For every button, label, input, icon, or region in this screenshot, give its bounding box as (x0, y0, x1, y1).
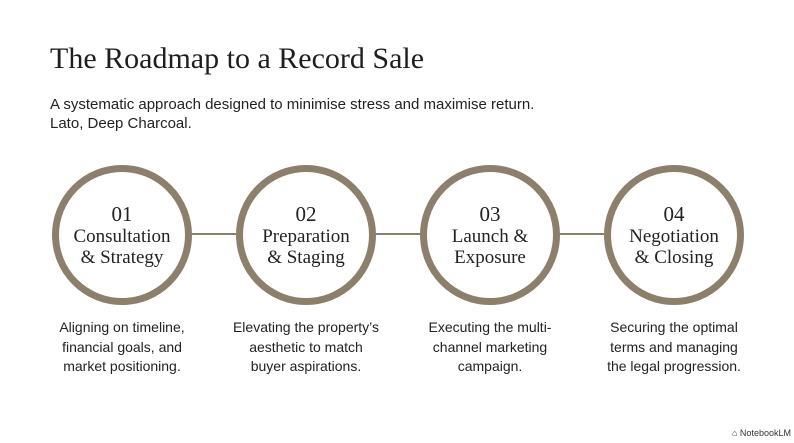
step 2 circle (236, 165, 376, 305)
subtitle: A systematic approach designed to minimise stress and maximise return. (50, 96, 534, 113)
step 2 circle: & Staging (267, 247, 345, 268)
connector line 2-3 (374, 233, 424, 235)
step 4 description: terms and managing (610, 338, 738, 354)
step 2 description (233, 319, 379, 374)
step 1 circle: 01 (112, 202, 132, 226)
step 4 circle: 04 (664, 202, 684, 226)
step 4 circle: & Closing (635, 247, 713, 268)
step 4 circle (604, 165, 744, 305)
step 1 description: financial goals, and (62, 338, 182, 354)
step 3 circle: Exposure (454, 247, 526, 268)
step 4 description (607, 319, 741, 374)
step 2 circle: 02 (296, 202, 316, 226)
connector line 3-4 (558, 233, 608, 235)
step 2 description: aesthetic to match (249, 338, 363, 354)
step 3 description (429, 319, 551, 374)
step 4 circle: Negotiation (629, 226, 719, 247)
logo: ⌂ NotebookLM (732, 428, 791, 438)
step 1 circle: & Strategy (81, 247, 163, 268)
step 1 circle: Consultation (73, 226, 171, 247)
step 2 circle: Preparation (262, 226, 350, 247)
step 4 description: the legal progression. (607, 358, 741, 374)
title: The Roadmap to a Record Sale (50, 42, 424, 75)
step 2 description: Elevating the property’s (233, 319, 379, 335)
step 1 description: Aligning on timeline, (59, 319, 185, 335)
step 1 circle (52, 165, 192, 305)
step 3 circle: 03 (480, 202, 500, 226)
step 1 description (59, 319, 185, 374)
step 1 description: market positioning. (63, 358, 181, 374)
subtitle (50, 96, 534, 132)
step 3 circle: Launch & (452, 226, 528, 247)
step 3 circle (420, 165, 560, 305)
step 3 description: channel marketing (433, 338, 547, 354)
step 2 description: buyer aspirations. (251, 358, 361, 374)
step 4 description: Securing the optimal (610, 319, 738, 335)
subtitle: Lato, Deep Charcoal. (50, 115, 192, 132)
step 3 description: campaign. (458, 358, 522, 374)
step 3 description: Executing the multi- (429, 319, 551, 335)
connector line 1-2 (190, 233, 240, 235)
